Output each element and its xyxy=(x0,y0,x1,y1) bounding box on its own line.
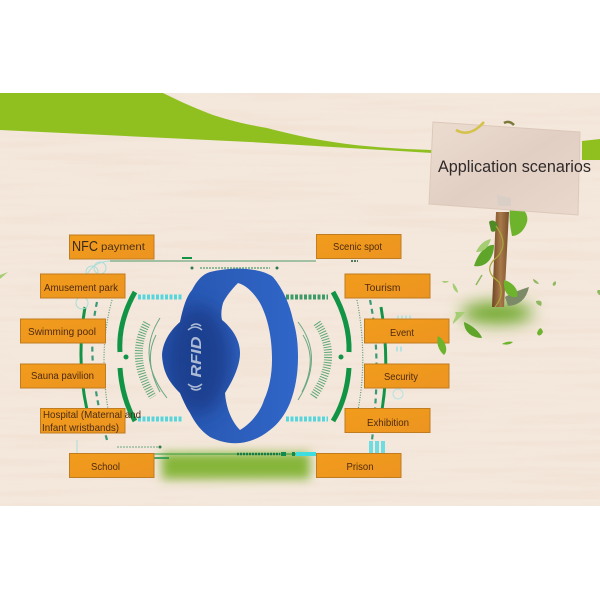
green swoosh banner xyxy=(0,93,600,160)
HUD graphic: left side xyxy=(76,261,194,453)
label: Event: Event xyxy=(390,328,414,339)
blue RFID wristband xyxy=(162,269,298,443)
connector line: top xyxy=(110,258,358,261)
HUD graphic: right side xyxy=(200,266,412,447)
label: Sauna pavilion: Sauna pavilion xyxy=(31,371,94,382)
label: Amusement park: Amusement park xyxy=(44,283,119,294)
label: Event xyxy=(364,319,449,343)
label: Swimming pool: Swimming pool xyxy=(28,327,96,338)
wristband pod shading xyxy=(166,305,230,415)
label: NFC payment xyxy=(70,235,154,259)
label: NFC payment: NFC xyxy=(72,238,98,255)
panel: wood background xyxy=(0,93,600,506)
signpost with vine xyxy=(461,205,533,324)
scattered leaves xyxy=(0,272,600,355)
title: Application scenarios: Application scenarios xyxy=(438,157,591,176)
green glow under wristband xyxy=(162,453,310,479)
label: NFC payment: payment xyxy=(101,241,145,253)
label: Scenic spot xyxy=(316,234,401,258)
label: Sauna pavilion xyxy=(20,364,106,388)
label: Scenic spot: Scenic spot xyxy=(333,242,382,253)
label: Security xyxy=(364,364,449,388)
label: Hospital: Hospital (Maternal and xyxy=(43,409,141,421)
label: Security: Security xyxy=(384,372,418,383)
label: Swimming pool xyxy=(20,319,106,343)
label: Prison: Prison xyxy=(346,462,374,473)
label: Hospital: Infant wristbands) xyxy=(42,422,119,434)
label: School: School xyxy=(91,462,120,473)
label: Hospital xyxy=(40,408,141,434)
label: Amusement park xyxy=(40,274,125,298)
label: Exhibition: Exhibition xyxy=(367,418,409,429)
connector line: bottom xyxy=(154,452,316,458)
label: Tourism xyxy=(345,274,430,298)
label: School xyxy=(70,454,154,478)
RFID logo xyxy=(188,324,205,390)
label: Tourism: Tourism xyxy=(364,283,400,294)
label: Exhibition xyxy=(345,408,430,432)
label: Prison xyxy=(316,454,401,478)
RFID logo: RFID xyxy=(188,336,205,378)
sign board xyxy=(429,122,591,215)
